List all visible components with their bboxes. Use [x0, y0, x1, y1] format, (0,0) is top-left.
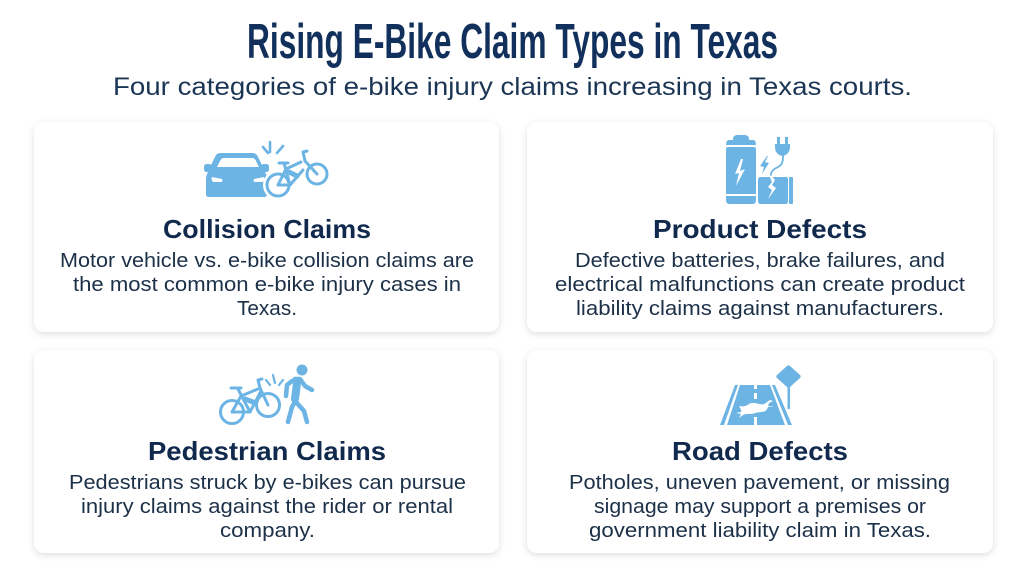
- subtitle: Four categories of e-bike injury claims increasing in Texas courts.: [113, 73, 912, 101]
- body text: Potholes, uneven pavement, or missing: [569, 472, 950, 494]
- panel: pedestrian claims: [34, 350, 499, 553]
- body text: Motor vehicle vs. e-bike collision claims are: [60, 250, 474, 272]
- icon: e-bike and pedestrian: [220, 364, 312, 424]
- body text: the most common e-bike injury cases in: [73, 274, 461, 296]
- body text: Defective batteries, brake failures, and: [575, 250, 945, 272]
- body text: [569, 472, 950, 542]
- body text: liability claims against manufacturers.: [576, 298, 944, 320]
- heading: Product Defects: [653, 214, 867, 244]
- icon: car and e-bike collision: [204, 142, 327, 200]
- panel: product defects: [527, 122, 993, 332]
- body text: electrical malfunctions can create product: [555, 274, 965, 296]
- body text: injury claims against the rider or rental: [81, 496, 453, 518]
- body text: Pedestrians struck by e-bikes can pursue: [69, 472, 466, 494]
- body text: signage may support a premises or: [594, 496, 926, 518]
- heading: Collision Claims: [163, 214, 371, 244]
- heading: Road Defects: [672, 436, 848, 466]
- icon: battery, plug and crack: [726, 135, 793, 204]
- panel: road defects: [527, 350, 993, 553]
- body text: Texas.: [237, 298, 297, 320]
- body text: company.: [220, 520, 315, 542]
- heading: Pedestrian Claims: [148, 436, 386, 466]
- body text: [69, 472, 466, 542]
- icon: damaged road and warning sign: [720, 365, 801, 425]
- body text: government liability claim in Texas.: [589, 520, 931, 542]
- body text: [60, 250, 474, 320]
- body text: [555, 250, 965, 320]
- panel: collision claims: [34, 122, 499, 332]
